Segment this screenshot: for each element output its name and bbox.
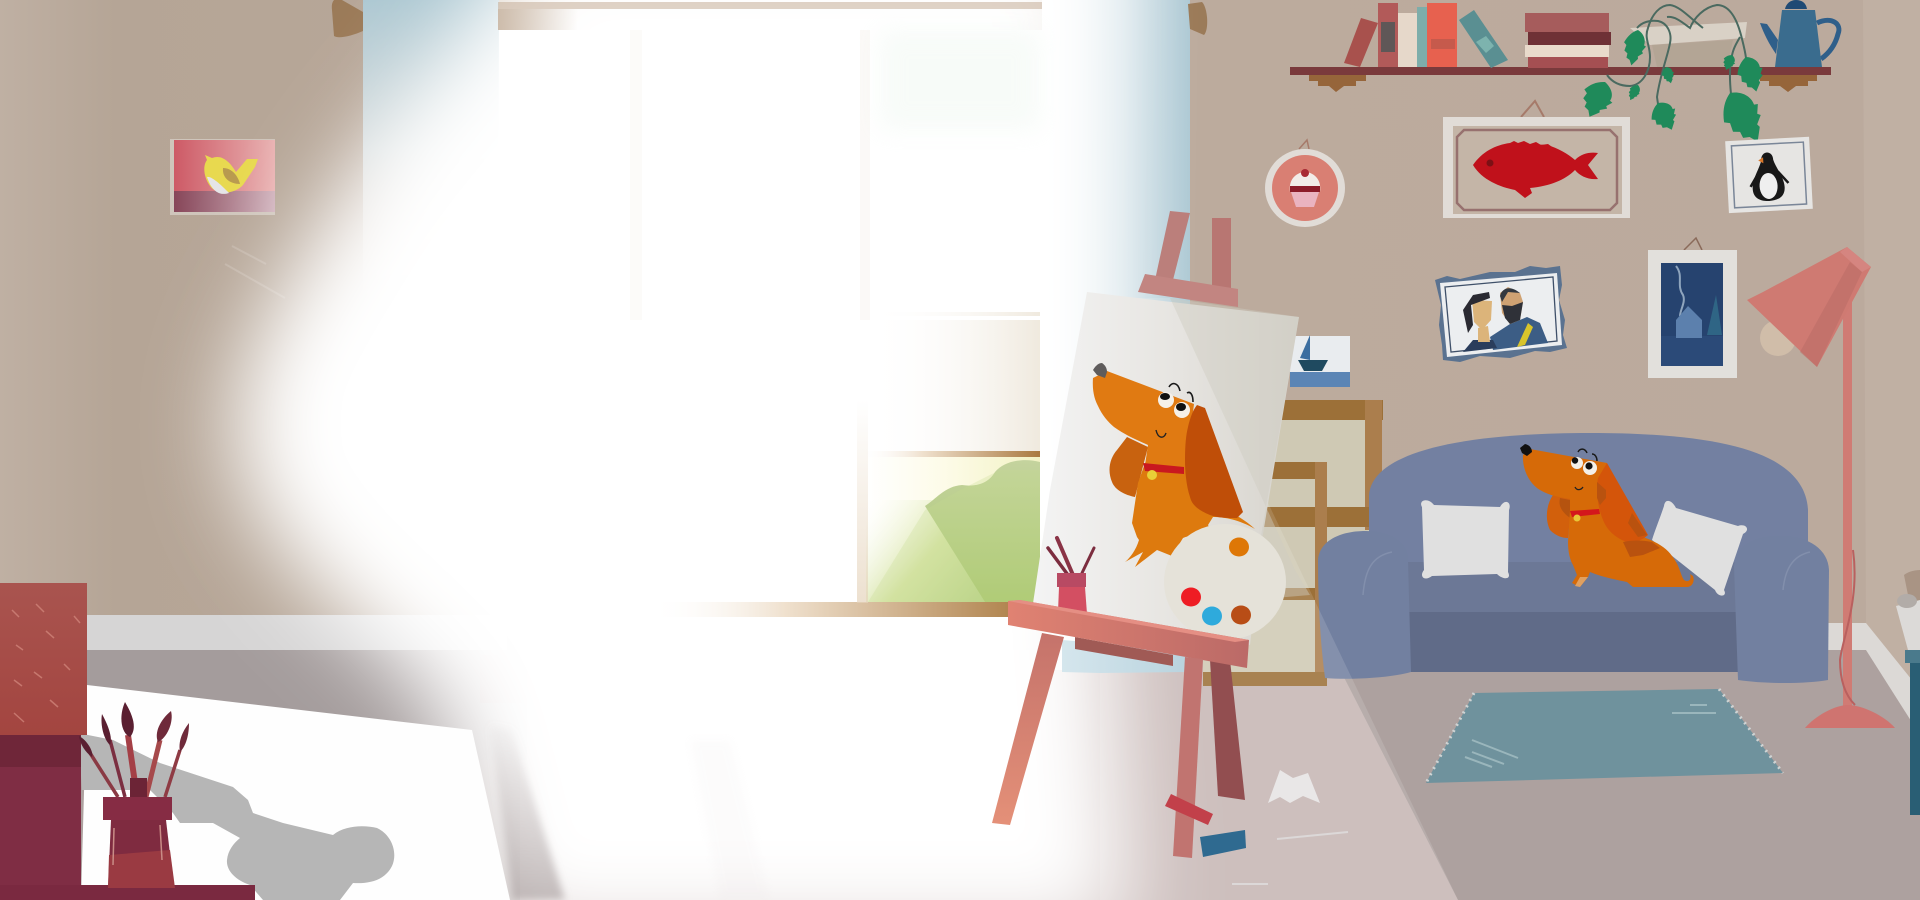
upper posts [1138, 211, 1238, 307]
paw [1575, 577, 1588, 587]
eyes [1158, 392, 1174, 408]
back ear [1547, 495, 1572, 538]
teapot [1760, 0, 1839, 67]
picture: cupcake [1265, 140, 1345, 227]
paper shadow [78, 733, 394, 900]
right side wall [1863, 0, 1920, 735]
woman [1463, 340, 1497, 352]
sofa [1318, 433, 1829, 683]
shelf [1290, 0, 1839, 151]
picture: red fish [1443, 101, 1630, 218]
window [498, 0, 1042, 617]
red block [0, 583, 87, 735]
floor [0, 648, 1920, 900]
ornate blue backing [1435, 266, 1567, 362]
head [1093, 371, 1194, 468]
left arm [1318, 531, 1411, 679]
side table right edge [1896, 570, 1920, 815]
tray [1008, 600, 1249, 668]
wall [0, 0, 1920, 660]
flower pot [1630, 22, 1747, 67]
front ear [1185, 405, 1243, 518]
hanging plant [1574, 5, 1773, 151]
easel [992, 211, 1310, 858]
paint tube red [1165, 794, 1213, 825]
back ear [1110, 437, 1148, 497]
floor band beside paper [87, 650, 527, 760]
sofa back [1369, 433, 1808, 568]
easel jar with brushes [1048, 538, 1094, 614]
man [1490, 317, 1548, 350]
picture: family portrait [1435, 266, 1567, 362]
head [1523, 449, 1607, 512]
faint wall scratches [225, 246, 285, 298]
nose [1520, 444, 1532, 456]
left leg [992, 633, 1064, 825]
floor streaks [490, 725, 770, 900]
canvas [1032, 292, 1299, 645]
foreground paper [81, 685, 510, 900]
sunlight bloom [234, 0, 1130, 900]
curtain hem under tray [1062, 640, 1187, 673]
faded red object near window [480, 655, 522, 703]
front ear [1597, 463, 1648, 543]
books [1344, 3, 1508, 68]
left cushion pillow [1421, 500, 1510, 578]
picture: night house [1648, 238, 1737, 378]
ear and body spots [1597, 482, 1660, 557]
sofa front [1405, 612, 1740, 672]
sofa seat [1405, 562, 1740, 614]
left curtain [363, 0, 499, 300]
nose [1093, 363, 1107, 378]
photo [1440, 273, 1562, 357]
collar [1143, 463, 1184, 474]
window top trim through glare [498, 2, 1042, 320]
picture: yellow bird [170, 139, 275, 215]
painted dog [1093, 363, 1255, 567]
arm folds [1363, 552, 1810, 595]
collar [1570, 509, 1600, 517]
curtain rod knob left [332, 0, 363, 37]
dog on sofa [1520, 444, 1694, 587]
middle leg [1173, 657, 1203, 858]
stacked books [1525, 13, 1611, 68]
window sill and bars [650, 312, 1040, 617]
sun patch on floor [520, 650, 1458, 900]
crumpled paper [1268, 770, 1320, 803]
back legs and brace [1210, 660, 1245, 800]
body and tail [1125, 440, 1255, 567]
wooden frames behind the easel [1203, 400, 1383, 686]
baseboard [87, 615, 1866, 650]
paint tube blue [1200, 830, 1246, 857]
body [1568, 500, 1694, 587]
foreground jar with brushes [79, 702, 189, 888]
eyes [1571, 457, 1583, 469]
picture: penguin [1725, 137, 1813, 213]
light shaft over room [1100, 298, 1458, 900]
picture: sailboat [1290, 335, 1350, 387]
brushes [79, 702, 189, 798]
window lower right pane with bush [866, 457, 1040, 602]
right curtain [1042, 0, 1190, 670]
right arm [1734, 536, 1829, 683]
dark cabinet [0, 735, 81, 885]
curtain rod knob right [1188, 2, 1207, 35]
floor scratches [1232, 832, 1348, 884]
rug [1426, 689, 1783, 783]
right cushion pillow [1652, 501, 1747, 596]
table edge [0, 885, 255, 900]
palette [1164, 524, 1286, 640]
floor lamp [1747, 247, 1895, 728]
